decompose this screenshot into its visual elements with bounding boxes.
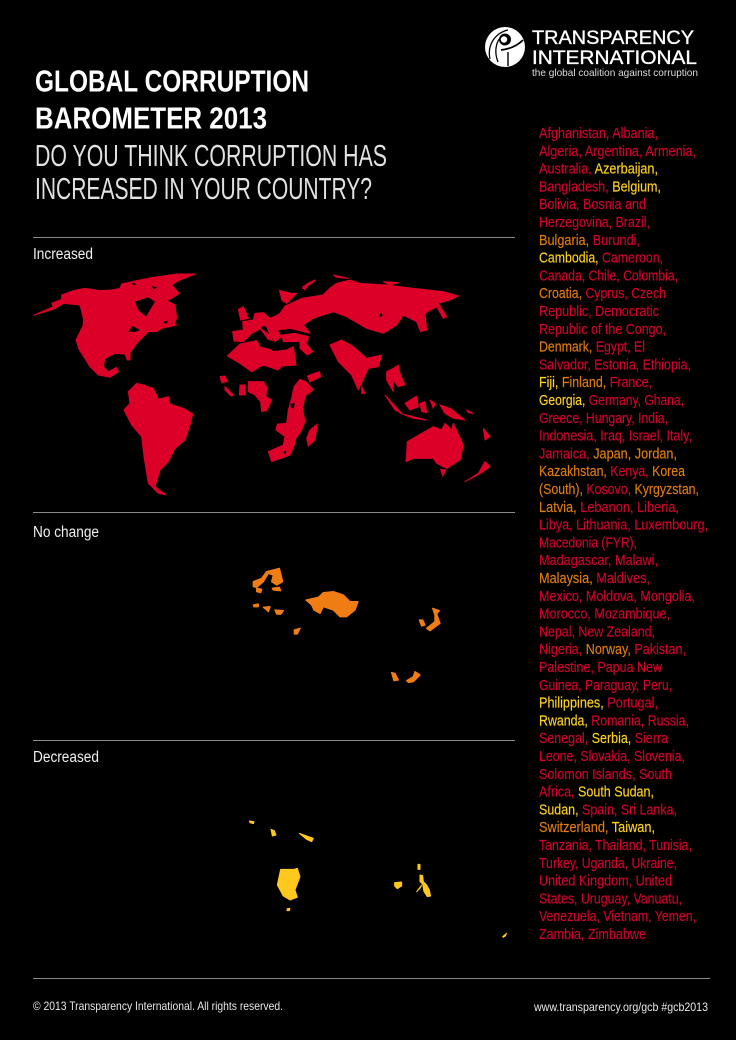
country list: Georgia, Germany, Ghana, bbox=[539, 392, 684, 409]
country list: Venezuela, Vietnam, Yemen, bbox=[539, 908, 696, 925]
country list: United Kingdom, United bbox=[539, 873, 672, 890]
subtitle question: DO YOU THINK CORRUPTION HAS bbox=[35, 138, 387, 173]
country list: Denmark, Egypt, El bbox=[539, 339, 645, 356]
country list: Palestine, Papua New bbox=[539, 659, 662, 676]
country list: Republic of the Congo, bbox=[539, 321, 666, 338]
country list: Leone, Slovakia, Slovenia, bbox=[539, 748, 685, 765]
subtitle question: INCREASED IN YOUR COUNTRY? bbox=[35, 171, 372, 206]
country list: Africa, South Sudan, bbox=[539, 784, 654, 801]
country list: Tanzania, Thailand, Tunisia, bbox=[539, 837, 692, 854]
icon: globe with figure bbox=[485, 27, 525, 67]
country list: Salvador, Estonia, Ethiopia, bbox=[539, 356, 691, 373]
logo tagline: the global coalition against corruption bbox=[532, 67, 698, 79]
Asia and Oceania bbox=[270, 275, 490, 482]
country list: Sudan, Spain, Sri Lanka, bbox=[539, 801, 677, 818]
logo wordmark line 2: INTERNATIONAL bbox=[532, 48, 697, 69]
country list: Senegal, Serbia, Sierra bbox=[539, 730, 669, 747]
footer: copyright: © 2013 Transparency International. All rights reserved. bbox=[33, 999, 283, 1013]
country list: Bangladesh, Belgium, bbox=[539, 178, 661, 195]
country list: Bulgaria, Burundi, bbox=[539, 232, 640, 249]
country list: Canada, Chile, Colombia, bbox=[539, 267, 678, 284]
country list: Greece, Hungary, India, bbox=[539, 410, 668, 427]
country list: Herzegovina, Brazil, bbox=[539, 214, 650, 231]
country list: Afghanistan, Albania, bbox=[539, 125, 658, 142]
country list: Cambodia, Cameroon, bbox=[539, 250, 663, 267]
country list: Bolivia, Bosnia and bbox=[539, 196, 646, 213]
heading: No change: No change bbox=[33, 524, 99, 541]
country list: Croatia, Cyprus, Czech bbox=[539, 285, 666, 302]
country list: Solomon Islands, South bbox=[539, 766, 672, 783]
country list: Republic, Democratic bbox=[539, 303, 659, 320]
country list: Rwanda, Romania, Russia, bbox=[539, 712, 689, 729]
subtitle question bbox=[35, 138, 387, 206]
country list: Algeria, Argentina, Armenia, bbox=[539, 143, 696, 160]
country list: Macedonia (FYR), bbox=[539, 534, 637, 551]
country list: Turkey, Uganda, Ukraine, bbox=[539, 855, 677, 872]
country list: Libya, Lithuania, Luxembourg, bbox=[539, 517, 708, 534]
title: GLOBAL CORRUPTION bbox=[35, 64, 309, 98]
Americas bbox=[33, 274, 195, 495]
title bbox=[35, 64, 309, 136]
country list: Zambia, Zimbabwe bbox=[539, 926, 646, 943]
country list: Malaysia, Maldives, bbox=[539, 570, 650, 587]
country list: Switzerland, Taiwan, bbox=[539, 819, 655, 836]
map: countries where corruption decreased bbox=[249, 821, 507, 937]
heading: Increased: Increased bbox=[33, 246, 93, 263]
country list: Mexico, Moldova, Mongolia, bbox=[539, 588, 695, 605]
country list: Guinea, Paraguay, Peru, bbox=[539, 677, 672, 694]
country list: Indonesia, Iraq, Israel, Italy, bbox=[539, 428, 692, 445]
country list: Morocco, Mozambique, bbox=[539, 606, 670, 623]
country list: Nigeria, Norway, Pakistan, bbox=[539, 641, 686, 658]
logo wordmark line 1: TRANSPARENCY bbox=[532, 28, 694, 49]
country list bbox=[539, 125, 708, 943]
country list: Nepal, New Zealand, bbox=[539, 623, 655, 640]
country list: States, Uruguay, Vanuatu, bbox=[539, 890, 682, 907]
title: BAROMETER 2013 bbox=[35, 100, 267, 136]
country list: Jamaica, Japan, Jordan, bbox=[539, 445, 677, 462]
country list: Australia, Azerbaijan, bbox=[539, 161, 658, 178]
footer: website and hashtag: www.transparency.org/gcb #gcb2013 bbox=[533, 1000, 708, 1014]
country list: Philippines, Portugal, bbox=[539, 695, 658, 712]
Europe and Africa bbox=[220, 281, 321, 462]
country list: Latvia, Lebanon, Liberia, bbox=[539, 499, 679, 516]
country list: Kazakhstan, Kenya, Korea bbox=[539, 463, 686, 480]
heading: Decreased: Decreased bbox=[33, 749, 99, 766]
map: countries where corruption increased bbox=[33, 274, 490, 495]
map: countries with no change bbox=[253, 568, 440, 682]
country list: (South), Kosovo, Kyrgyzstan, bbox=[539, 481, 699, 498]
country list: Madagascar, Malawi, bbox=[539, 552, 658, 569]
logo: Transparency International bbox=[485, 27, 698, 79]
country list: Fiji, Finland, France, bbox=[539, 374, 652, 391]
